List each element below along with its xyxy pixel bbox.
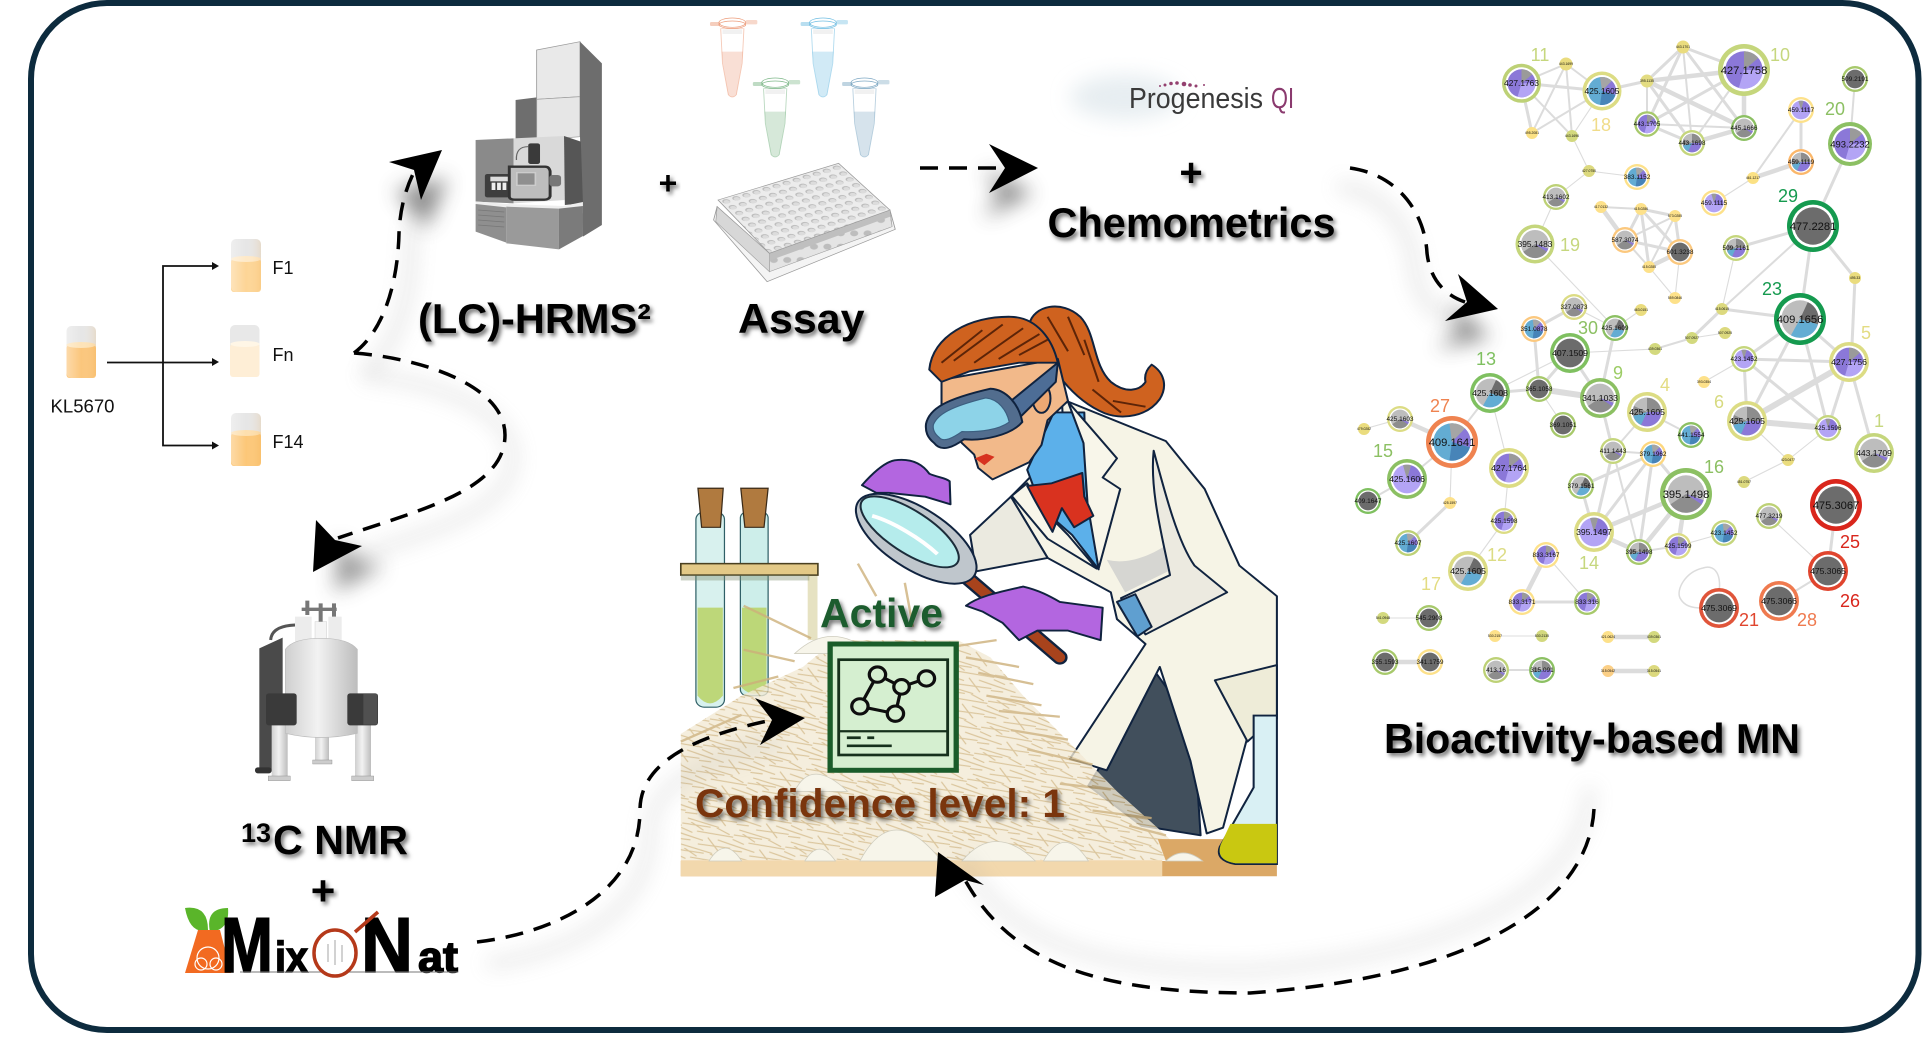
icon: LC-HRMS instrument — [476, 42, 602, 249]
panel: fractionation scheme — [50, 239, 304, 466]
title: 13C NMR: 13 — [241, 818, 271, 848]
icon: tubes — [710, 18, 889, 157]
vial: F1 — [231, 239, 261, 292]
illustration: flask — [1219, 716, 1277, 864]
cluster numbers: 20 — [1825, 99, 1845, 119]
vial: KL5670 — [66, 326, 96, 378]
network nodes: small: 507.0927 — [1685, 336, 1699, 340]
illustration: test tube rack — [681, 488, 818, 707]
logo text: ix — [275, 933, 308, 982]
network nodes: small: 443.1699 — [1559, 62, 1573, 66]
title: Chemometrics: Chemometrics — [1048, 199, 1336, 246]
hair ponytail — [1029, 307, 1164, 416]
logo leaves — [185, 908, 228, 932]
blue cuff — [1117, 594, 1152, 636]
network nodes: small: 530.2157 — [1488, 634, 1502, 638]
left lapel — [1012, 483, 1097, 569]
network nodes: small: 417.0132 — [1594, 205, 1608, 209]
network nodes: small — [1357, 40, 1861, 677]
labels: fractions: F1 — [272, 258, 294, 278]
logo: Progenesis QI: QI — [1271, 83, 1294, 115]
blue shirt — [1027, 412, 1099, 569]
chest shading — [1107, 543, 1172, 592]
hair strands — [942, 317, 1146, 412]
cluster numbers: 18 — [1591, 115, 1611, 135]
ear — [1033, 384, 1050, 413]
coat skirt detail — [1215, 665, 1277, 742]
logo: Progenesis QI: Progenesis — [1129, 83, 1263, 115]
logo flask rings — [195, 947, 222, 970]
cluster numbers: 14 — [1579, 553, 1599, 573]
logo text: N — [361, 901, 413, 989]
network nodes: small: 415.0286 — [1634, 207, 1648, 211]
branching arrows — [107, 262, 219, 450]
left sleeve — [970, 497, 1048, 571]
logo magnifier — [314, 930, 356, 976]
logo flask — [185, 930, 231, 973]
network nodes: small: 463.0151 — [1634, 308, 1648, 312]
icon: active compound network card — [830, 644, 956, 770]
panel: central illustration — [681, 307, 1277, 876]
plus: between HRMS and assay: + — [659, 165, 677, 201]
illustration: table — [681, 839, 1277, 876]
cluster numbers: 29 — [1778, 186, 1798, 206]
network nodes: small: 393.0354 — [1697, 380, 1711, 384]
plus: NMR and MixONat: + — [311, 867, 335, 914]
cluster numbers: 19 — [1560, 235, 1580, 255]
arrow: MixONat to active — [477, 698, 805, 964]
cluster numbers: 5 — [1861, 323, 1871, 343]
label: Active: Active — [820, 590, 943, 636]
cluster numbers: 4 — [1660, 375, 1670, 395]
title: Assay: Assay — [738, 295, 865, 342]
magnifier handle — [964, 575, 1060, 657]
trousers — [1088, 673, 1201, 835]
vial: F14 — [231, 413, 261, 466]
network nodes: small: 541.0948 — [1376, 616, 1390, 620]
network nodes: small: 573.0285 — [1668, 214, 1682, 218]
network nodes: small: 425.1597 — [1443, 501, 1457, 505]
hair crown — [929, 317, 1058, 382]
cluster numbers: 1 — [1874, 411, 1884, 431]
cluster numbers: 13 — [1476, 349, 1496, 369]
plus: progenesis and chemometrics: + — [1179, 151, 1203, 195]
network nodes: small: 443.1696 — [1565, 134, 1579, 138]
network nodes: small: 415.0285 — [1642, 265, 1656, 269]
labels: fractions — [272, 258, 304, 452]
network nodes: small: 443.1701 — [1676, 45, 1690, 49]
network edges — [1364, 47, 1874, 671]
goggles — [926, 389, 1022, 448]
cluster numbers: 16 — [1704, 457, 1724, 477]
cluster numbers: 30 — [1578, 318, 1598, 338]
network nodes: small: 559.0846 — [1668, 296, 1682, 300]
logo: MixONat — [185, 901, 458, 989]
forearm sleeve — [1121, 451, 1227, 634]
network nodes: small: 439.0361 — [1648, 347, 1662, 351]
lips — [975, 454, 995, 465]
network nodes: small: 415.0615 — [1715, 307, 1729, 311]
vial: Fn — [230, 325, 260, 377]
illustration: powder mounds — [709, 636, 1203, 861]
network nodes: small: 315.0542 — [1601, 669, 1615, 673]
network nodes: small: 427.0750 — [1582, 169, 1596, 173]
network nodes: small: 461.1217 — [1746, 176, 1760, 180]
panel: bioactivity-based molecular network — [1354, 40, 1894, 683]
network nodes: large — [1387, 44, 1894, 628]
cluster numbers: 15 — [1373, 441, 1393, 461]
title: Bioactivity-based MN: Bioactivity-based MN — [1384, 715, 1800, 762]
network nodes: small: 395.1135 — [1640, 79, 1654, 83]
illustration: woman scientist — [840, 307, 1277, 835]
arrow: fractions to NMR — [313, 353, 513, 592]
cluster numbers: 27 — [1430, 396, 1450, 416]
labels: fractions: F14 — [272, 432, 304, 452]
network nodes: small: 507.0925 — [1718, 331, 1732, 335]
icon: NMR spectrometer — [255, 601, 378, 781]
cluster numbers: 26 — [1840, 591, 1860, 611]
cluster numbers: 11 — [1531, 45, 1549, 65]
title: LC-HRMS: (LC)-HRMS² — [418, 295, 651, 342]
goggle strap — [1011, 363, 1058, 418]
cluster numbers: 23 — [1762, 279, 1782, 299]
arrow: fractions to LC-HRMS — [354, 150, 448, 371]
bow tie — [1027, 473, 1093, 532]
logo: Progenesis QI — [1070, 75, 1294, 119]
goggle lens — [933, 398, 1009, 440]
cluster numbers: 12 — [1487, 545, 1507, 565]
label: KL5670: KL5670 — [50, 396, 114, 416]
network nodes: small: 495.2081 — [1525, 131, 1539, 135]
network nodes: small: 421.0624 — [1601, 635, 1615, 639]
logo text: M — [221, 901, 273, 989]
labels: fractions: Fn — [272, 345, 294, 365]
network nodes: small: 451.0757 — [1737, 480, 1751, 484]
panel: assay icons — [710, 18, 895, 282]
icon: 96-well plate — [714, 163, 895, 282]
cluster numbers: 17 — [1421, 574, 1441, 594]
right lapel — [1068, 402, 1120, 569]
network nodes: small: 479.0282 — [1357, 427, 1371, 431]
logo text — [221, 901, 458, 989]
cluster numbers: 21 — [1739, 610, 1759, 630]
arrow: assay to chemometrics — [920, 144, 1038, 218]
title: 13C NMR: C NMR — [273, 817, 408, 863]
logo text: at — [418, 933, 458, 982]
neck and face — [942, 359, 1068, 479]
network nodes: small: 439.0361 — [1647, 635, 1661, 639]
label: Confidence level: Confidence level: 1 — [695, 782, 1065, 826]
lab coat — [1011, 399, 1277, 833]
cluster numbers — [1373, 45, 1884, 630]
lower glove — [966, 587, 1103, 640]
arrow: network to active — [935, 787, 1594, 993]
network nodes: medium — [1354, 66, 1869, 683]
magnifier — [840, 477, 992, 601]
cluster numbers: 6 — [1714, 392, 1724, 412]
illustration: haystack — [681, 564, 1190, 860]
cluster numbers: 25 — [1840, 532, 1860, 552]
network nodes: small: 530.2135 — [1535, 634, 1549, 638]
top glove — [862, 460, 950, 504]
network nodes: small: 423.0477 — [1781, 458, 1795, 462]
network nodes: small: 315.0541 — [1647, 669, 1661, 673]
cluster numbers: 10 — [1770, 45, 1790, 65]
cluster numbers: 9 — [1613, 363, 1623, 383]
cluster numbers: 28 — [1797, 610, 1817, 630]
arrow: chemometrics to network — [1338, 168, 1498, 349]
network nodes: small: 495.33 — [1850, 276, 1860, 280]
